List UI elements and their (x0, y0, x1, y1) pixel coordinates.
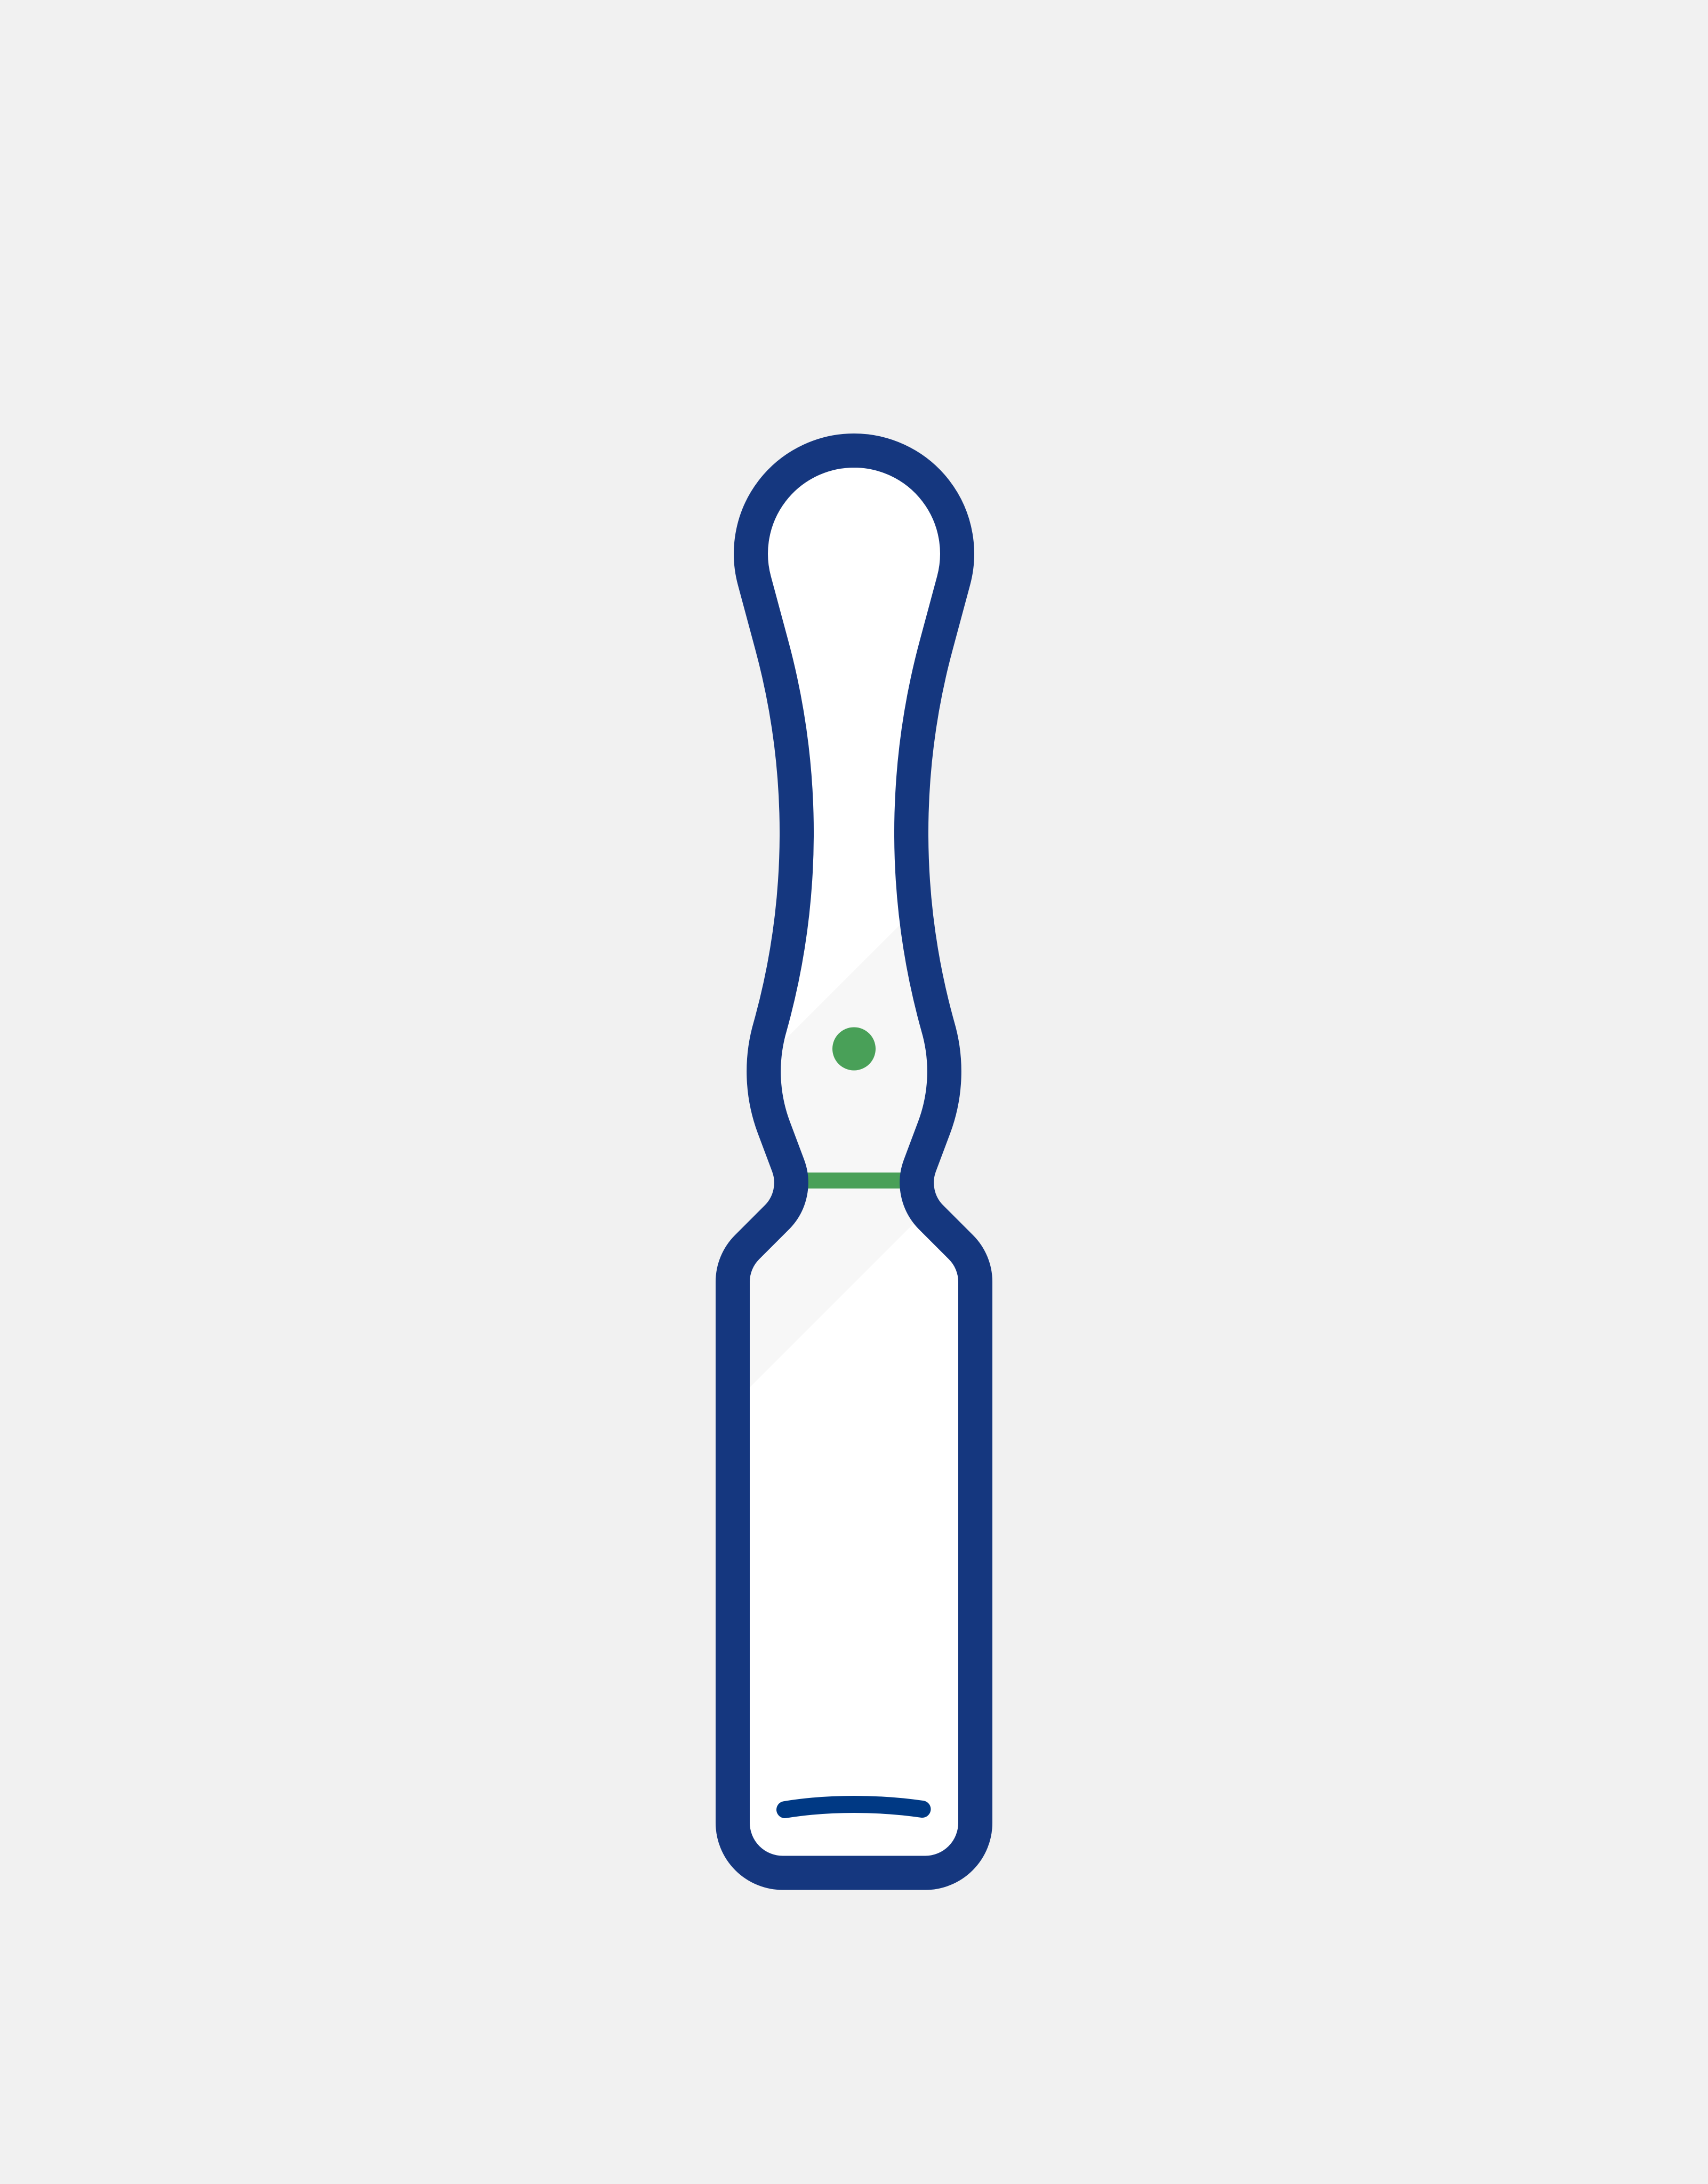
ampoule (716, 433, 992, 1890)
green break-point dot (832, 1027, 876, 1071)
green break-line bar (800, 1173, 908, 1189)
diagonal glass reflection band (693, 812, 1013, 1444)
ampoule glass fill (733, 451, 975, 1873)
illustration: glass ampoule on light grey background (716, 433, 992, 1890)
curved base highlight line (785, 1804, 923, 1810)
ampoule outline (733, 451, 975, 1873)
